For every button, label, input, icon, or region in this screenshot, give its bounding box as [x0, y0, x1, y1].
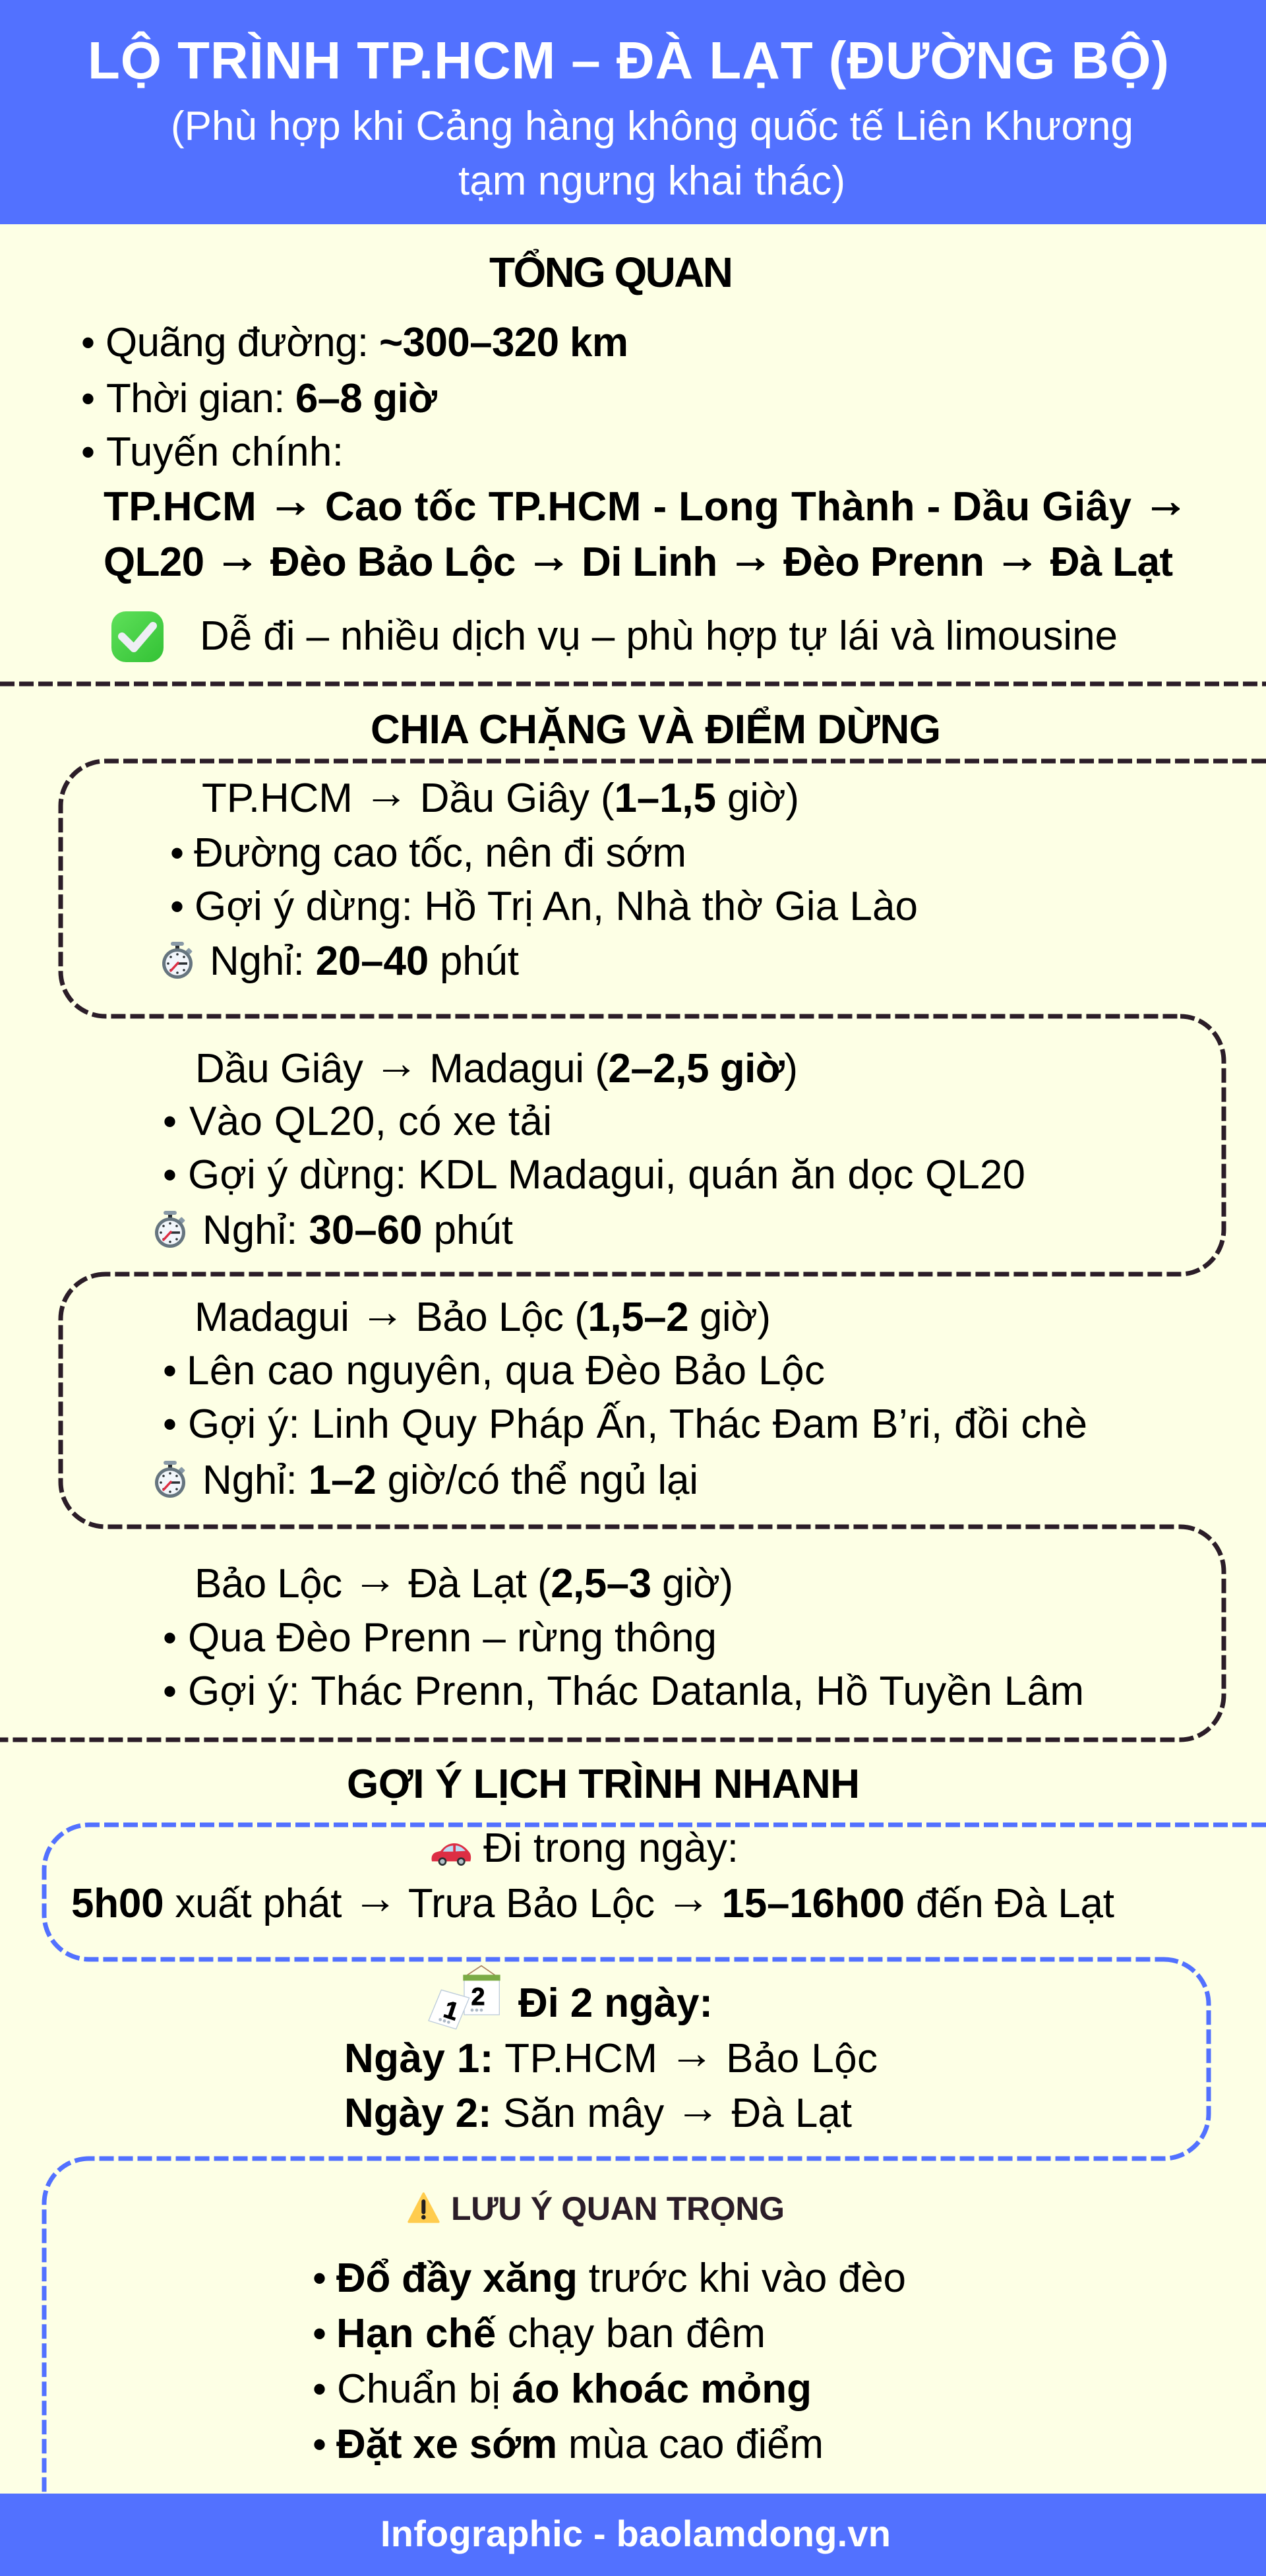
- stage 4 bullets: [163, 1615, 1084, 1714]
- stage 1 bullets: Gợi ý dừng: Hồ Trị An, Nhà thờ Gia Lào: [195, 884, 918, 929]
- two-day schedule: [344, 2028, 878, 2136]
- one-day schedule: 5h00 xuất phát: [71, 1881, 342, 1926]
- two-day schedule: →: [669, 2028, 714, 2078]
- one-day schedule: Trưa Bảo Lộc: [398, 1881, 666, 1926]
- subtitle: [171, 104, 1133, 204]
- title: LỘ TRÌNH TP.HCM – ĐÀ LẠT (ĐƯỜNG BỘ): [88, 31, 1169, 90]
- icon: stopwatch: [162, 942, 193, 979]
- subtitle: tạm ngưng khai thác): [458, 158, 845, 204]
- overview facts: Tuyến chính:: [106, 429, 344, 475]
- main route: Đèo Bảo Lộc: [259, 539, 527, 585]
- subtitle: (Phù hợp khi Cảng hàng không quốc tế Liên Khương: [171, 104, 1133, 149]
- heading: overview: TỔNG QUAN: [489, 248, 733, 296]
- two-day schedule: Ngày 2: Săn mây: [344, 2091, 664, 2136]
- two-day heading: Đi 2 ngày:: [518, 1980, 713, 2026]
- one-day schedule: →: [353, 1873, 398, 1923]
- main route: QL20: [104, 539, 204, 585]
- icon: calendar: 1: [440, 1995, 462, 2025]
- stage 4 title: 2,5–3 giờ): [551, 1561, 733, 1607]
- overview facts: •: [81, 321, 95, 365]
- stage 1 title: TP.HCM: [202, 776, 353, 821]
- stage 1 title: 1–1,5 giờ): [614, 776, 799, 821]
- stage 1 bullets: Đường cao tốc, nên đi sớm: [194, 830, 686, 876]
- icon: stopwatch: [155, 1211, 185, 1248]
- overview note: Dễ đi – nhiều dịch vụ – phù hợp tự lái và limousine: [200, 613, 1118, 659]
- stage 1 bullets: •: [170, 831, 184, 875]
- stage 2 title: Madagui (: [419, 1046, 609, 1091]
- stage 1 title: Dầu Giây (: [409, 776, 615, 821]
- stage 3 bullets: •: [163, 1349, 177, 1393]
- main route: Cao tốc TP.HCM - Long Thành - Dầu Giây: [313, 484, 1143, 530]
- notes list: •: [313, 2256, 326, 2300]
- stage 3 bullets: [163, 1348, 1087, 1447]
- main route: →: [215, 532, 260, 582]
- two-day schedule: Ngày 1: TP.HCM: [344, 2036, 657, 2081]
- two-day schedule: Bảo Lộc: [714, 2036, 878, 2081]
- stage 1 title: →: [364, 768, 409, 818]
- stage 2 title: 2–2,5 giờ): [608, 1046, 798, 1091]
- stage 1 bullets: •: [170, 884, 184, 929]
- stage 1 bullets: [170, 830, 918, 929]
- panel: two-day trip: [89, 1959, 1209, 2159]
- main route: [104, 476, 1188, 585]
- panel: stage 4: [0, 1527, 1224, 1740]
- stage 4 bullets: Gợi ý: Thác Prenn, Thác Datanla, Hồ Tuyền Lâm: [188, 1669, 1084, 1714]
- stage 2 rest: Nghỉ: 30–60 phút: [202, 1208, 513, 1253]
- stage 2 bullets: [163, 1099, 1025, 1198]
- notes list: •: [313, 2312, 326, 2356]
- icon: green check: [111, 611, 164, 662]
- main route: →: [995, 532, 1040, 582]
- stage 2 bullets: •: [163, 1153, 177, 1197]
- one-day heading: Đi trong ngày:: [483, 1825, 738, 1871]
- footer banner: [0, 2494, 1266, 2576]
- heading: stages: CHIA CHẶNG VÀ ĐIỂM DỪNG: [371, 707, 941, 752]
- main route: Đèo Prenn: [773, 539, 996, 585]
- panel: important notes: [44, 2159, 906, 2499]
- stage 2 bullets: Vào QL20, có xe tải: [189, 1099, 552, 1144]
- overview facts: •: [81, 377, 95, 421]
- icon: car: [432, 1843, 471, 1866]
- overview facts: •: [81, 430, 95, 474]
- stage 4 bullets: •: [163, 1669, 177, 1713]
- stage 3 title: Bảo Lộc (: [405, 1295, 588, 1340]
- two-day schedule: Đà Lạt: [720, 2091, 852, 2136]
- notes list: Chuẩn bị áo khoác mỏng: [337, 2366, 812, 2412]
- stage 3 title: 1,5–2 giờ): [588, 1295, 771, 1340]
- main route: TP.HCM: [104, 484, 256, 530]
- stage 3 bullets: Lên cao nguyên, qua Đèo Bảo Lộc: [187, 1348, 825, 1394]
- icon: stopwatch: [155, 1461, 185, 1498]
- stage 2 bullets: Gợi ý dừng: KDL Madagui, quán ăn dọc QL20: [188, 1152, 1025, 1198]
- notes list: [313, 2255, 906, 2467]
- stage 2 bullets: •: [163, 1099, 177, 1144]
- stage 3 title: Madagui: [195, 1295, 349, 1340]
- two-day schedule: →: [675, 2083, 720, 2133]
- stage 4 title: →: [353, 1553, 398, 1603]
- main route: →: [1143, 476, 1188, 526]
- icon: calendar: [429, 1966, 500, 2029]
- stage 3 bullets: •: [163, 1402, 177, 1446]
- notes list: Đổ đầy xăng trước khi vào đèo: [336, 2255, 906, 2301]
- notes heading: LƯU Ý QUAN TRỌNG: [451, 2190, 785, 2227]
- panel: stage 2: [106, 1016, 1224, 1274]
- icon: calendar: 2: [471, 1982, 485, 2010]
- stage 4 bullets: •: [163, 1616, 177, 1660]
- footer credit: Infographic - baolamdong.vn: [380, 2513, 891, 2554]
- stage 4 title: Bảo Lộc: [195, 1561, 342, 1607]
- panel: stage 1: [61, 761, 1266, 1016]
- panel: stage 3: [61, 1274, 1180, 1527]
- main route: Đà Lạt: [1039, 539, 1173, 585]
- panel: one-day trip: [44, 1825, 1266, 1959]
- panel: overview: [81, 248, 1188, 662]
- stage 3 title: →: [360, 1287, 405, 1337]
- stage 1 rest: Nghỉ: 20–40 phút: [210, 938, 519, 984]
- stage 2 title: Dầu Giây: [195, 1046, 363, 1091]
- icon: warning: [409, 2193, 438, 2222]
- main route: →: [526, 532, 571, 582]
- main route: →: [268, 476, 313, 526]
- main route: →: [728, 532, 773, 582]
- stage 3 bullets: Gợi ý: Linh Quy Pháp Ấn, Thác Đam B’ri, đồi chè: [188, 1401, 1087, 1447]
- main route: Di Linh: [571, 539, 729, 585]
- notes list: Hạn chế chạy ban đêm: [336, 2311, 766, 2356]
- one-day schedule: 15–16h00 đến Đà Lạt: [722, 1881, 1114, 1926]
- overview facts: Thời gian: 6–8 giờ: [106, 376, 438, 421]
- stage 2 title: →: [374, 1038, 419, 1088]
- one-day schedule: →: [666, 1873, 711, 1923]
- notes list: •: [313, 2367, 326, 2411]
- stage 4 bullets: Qua Đèo Prenn – rừng thông: [188, 1615, 717, 1661]
- header banner: [0, 0, 1266, 224]
- stage 4 title: Đà Lạt (: [398, 1561, 551, 1607]
- overview facts: Quãng đường: ~300–320 km: [106, 320, 628, 365]
- overview facts: [81, 320, 628, 475]
- notes list: Đặt xe sớm mùa cao điểm: [336, 2422, 824, 2467]
- notes list: •: [313, 2422, 326, 2467]
- heading: quick itinerary: GỢI Ý LỊCH TRÌNH NHANH: [347, 1762, 860, 1807]
- stage 3 rest: Nghỉ: 1–2 giờ/có thể ngủ lại: [202, 1457, 698, 1503]
